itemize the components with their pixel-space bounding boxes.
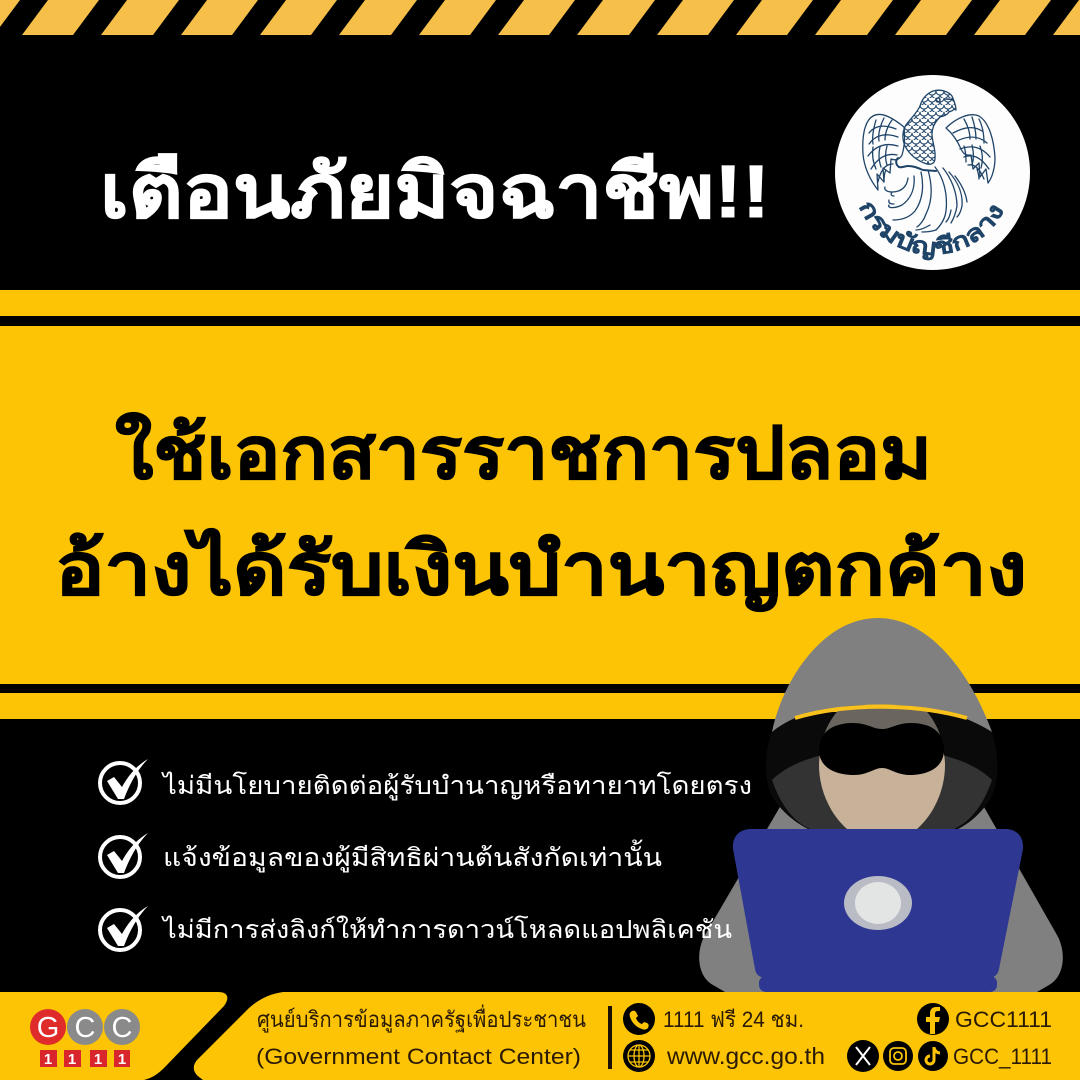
logo: GCC 1111: G: [37, 1012, 59, 1044]
logo: Comptroller General seal: [835, 75, 1030, 270]
logo: GCC 1111: C: [75, 1012, 95, 1044]
bullet 1: ไม่มีนโยบายติดต่อผู้รับบำนาญหรือทายาทโดยตรง: [161, 771, 752, 801]
facebook handle: GCC1111: [955, 1007, 1052, 1032]
mask: [819, 723, 944, 775]
left wing: [863, 114, 905, 190]
yellow banner with black rules: [0, 290, 1080, 719]
logo: GCC 1111: 1: [68, 1051, 76, 1068]
icon: x: [847, 1040, 879, 1072]
icon: globe: [623, 1040, 655, 1072]
laptop logo: [844, 876, 912, 930]
logo: GCC 1111: 1: [94, 1051, 102, 1068]
logo: GCC 1111: 1: [118, 1051, 126, 1068]
footer divider: [608, 1006, 612, 1069]
body and head: [903, 90, 956, 164]
hazard stripes top band: [0, 0, 1080, 35]
logo: GCC 1111: C: [112, 1012, 132, 1044]
forehead shadow: [824, 705, 940, 735]
hood collar dark: [766, 712, 997, 829]
illustration: hooded hacker with laptop: [699, 618, 1063, 992]
bullet 2: แจ้งข้อมูลของผู้มีสิทธิผ่านต้นสังกัดเท่านั้น: [163, 839, 662, 873]
footer org name english: (Government Contact Center): [256, 1044, 581, 1069]
headline line 1: ใช้เอกสารราชการปลอม: [115, 411, 932, 494]
hood yellow trim: [795, 707, 967, 718]
icon: check 2: [100, 833, 148, 877]
claws: [896, 158, 936, 171]
footer bar: [0, 992, 1080, 1080]
tiktok handle: GCC_1111: [953, 1044, 1052, 1069]
tail feathers: [885, 167, 967, 232]
website text: www.gcc.go.th: [666, 1043, 825, 1069]
icon: facebook: [917, 1003, 949, 1035]
hood inner grey: [772, 755, 992, 829]
hood: [772, 618, 992, 732]
eye and beak: [936, 98, 953, 102]
hoodie body: [699, 800, 1063, 992]
footer org name thai: ศูนย์บริการข้อมูลภาครัฐเพื่อประชาชน: [257, 1004, 586, 1033]
icon: instagram: [883, 1041, 913, 1071]
right wing: [946, 115, 995, 183]
checklist: [100, 759, 752, 950]
title: เตือนภัยมิจฉาชีพ!!: [100, 150, 770, 233]
phone text: 1111 ฟรี 24 ชม.: [663, 1007, 804, 1032]
logo: GCC 1111: 1: [44, 1051, 52, 1068]
bullet 3: ไม่มีการส่งลิงก์ให้ทำการดาวน์โหลดแอปพลิเคชัน: [161, 915, 732, 944]
seal text arc path: [859, 206, 1006, 254]
laptop lid: [733, 829, 1023, 978]
icon: check 3: [100, 906, 148, 950]
headline line 2: อ้างได้รับเงินบำนาญตกค้าง: [55, 527, 1027, 612]
laptop base: [759, 976, 997, 992]
seal text: กรมบัญชีกลาง: [858, 202, 1003, 260]
icon: check 1: [100, 759, 148, 803]
icon: tiktok: [918, 1041, 948, 1071]
face: [819, 705, 945, 829]
icon: garuda bird: [863, 90, 995, 232]
logo: GCC 1111: [30, 1009, 140, 1068]
icon: phone: [623, 1003, 655, 1035]
